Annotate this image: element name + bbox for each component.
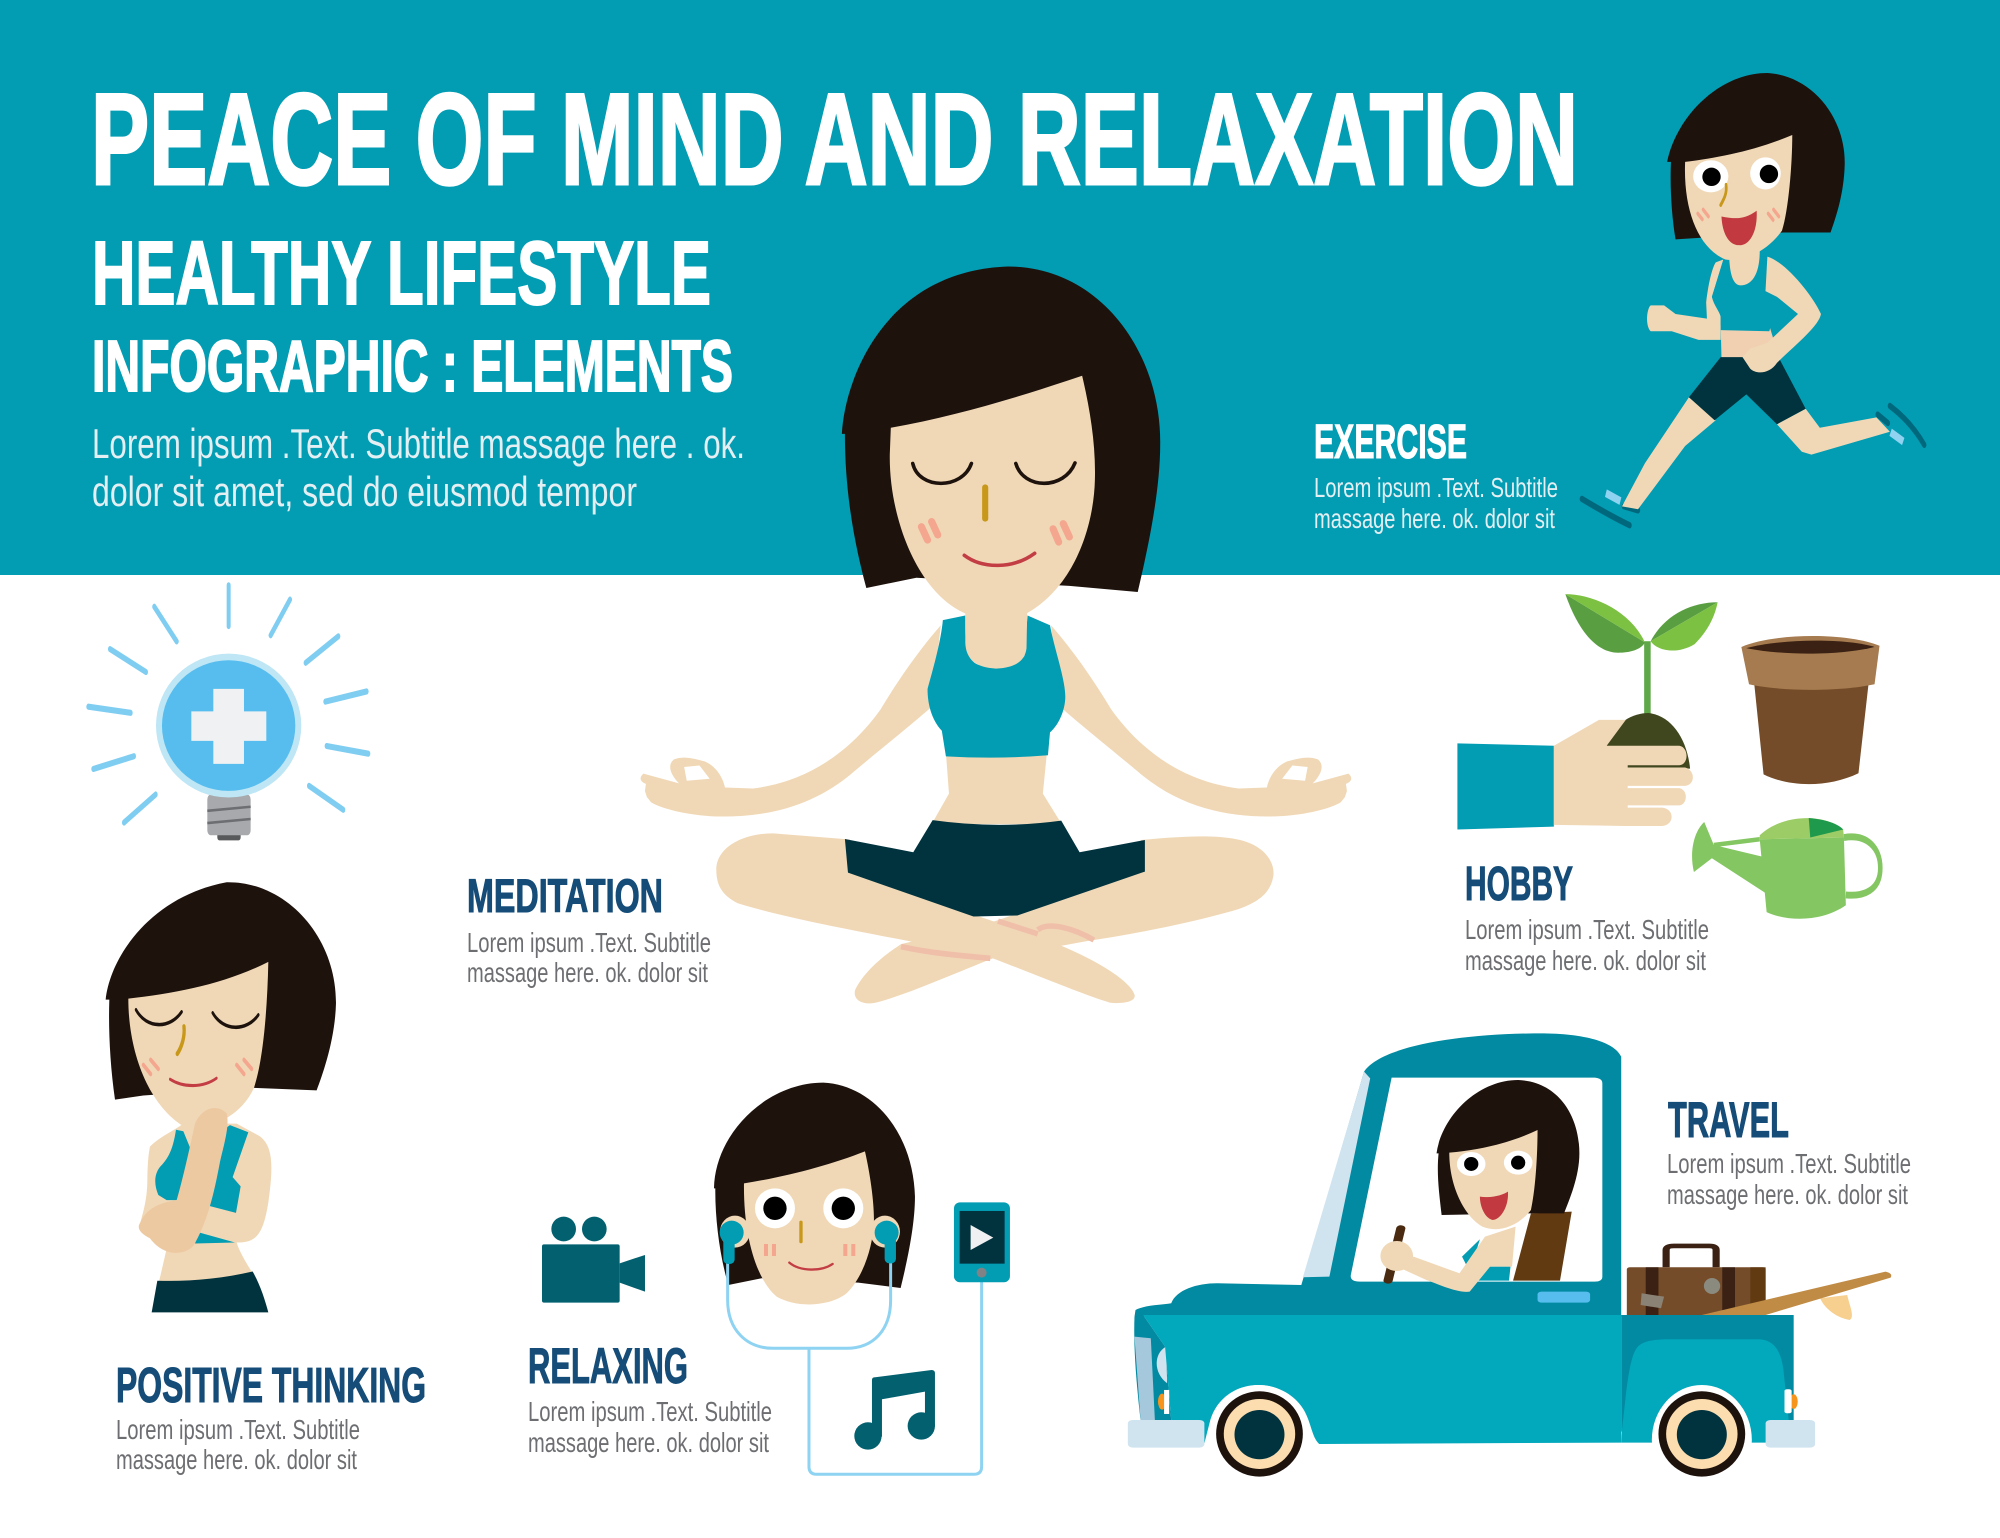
cross	[191, 689, 266, 764]
shorts	[1689, 354, 1806, 424]
cab body	[1143, 1315, 1621, 1444]
running woman	[1582, 73, 1924, 525]
heading: MEDITATION	[467, 869, 663, 922]
hair	[1667, 73, 1845, 239]
intro text	[92, 420, 745, 515]
mouth	[170, 1078, 217, 1086]
driver top	[1462, 1239, 1511, 1281]
description	[116, 1414, 360, 1475]
description	[528, 1396, 772, 1458]
icon: video camera	[542, 1217, 645, 1303]
right leg	[855, 836, 1274, 1003]
side window	[1351, 1078, 1602, 1282]
header banner	[0, 0, 2000, 575]
nose	[979, 487, 991, 519]
face	[1685, 135, 1792, 260]
description: Lorem ipsum .Text. Subtitle	[467, 927, 711, 958]
description	[1667, 1148, 1911, 1210]
steering wheel	[1388, 1228, 1401, 1281]
shorts	[152, 1272, 268, 1312]
label: relaxing	[528, 1338, 772, 1458]
hair	[106, 882, 336, 1100]
top	[1712, 257, 1777, 331]
label: hobby	[1465, 858, 1709, 976]
music player	[954, 1202, 1010, 1282]
right arm	[1051, 625, 1351, 817]
intro text: Lorem ipsum .Text. Subtitle massage here . ok.	[92, 420, 745, 467]
eyes	[755, 1188, 863, 1228]
raised arm	[139, 1108, 228, 1253]
left leg	[716, 833, 1135, 1003]
surfboard fin	[1820, 1295, 1852, 1320]
label: exercise	[1314, 416, 1558, 534]
eyes	[136, 1010, 258, 1027]
seat	[1513, 1212, 1572, 1281]
seedling	[1565, 594, 1718, 716]
watering can	[1692, 818, 1880, 919]
driver eyes	[1457, 1151, 1532, 1176]
blush	[1698, 210, 1779, 220]
foot lines	[901, 921, 1094, 958]
left arm	[641, 625, 941, 817]
rear wheel	[1652, 1385, 1752, 1495]
label: positive thinking	[116, 1359, 426, 1475]
truck front	[1134, 1315, 1171, 1421]
sports top	[928, 616, 1065, 758]
mouth	[789, 1263, 833, 1270]
description: Lorem ipsum .Text. Subtitle	[1314, 472, 1558, 503]
face	[744, 1151, 874, 1304]
truck cab	[1134, 1033, 1621, 1317]
shoe soles	[1582, 406, 1924, 525]
headlight	[1157, 1347, 1167, 1383]
pot	[1741, 636, 1880, 784]
surfboard	[1702, 1272, 1891, 1315]
title block	[91, 66, 1578, 515]
soil	[1607, 713, 1690, 769]
driver face	[1449, 1130, 1538, 1229]
heading: EXERCISE	[1314, 416, 1467, 469]
description: Lorem ipsum .Text. Subtitle	[1667, 1148, 1911, 1179]
driver hair	[1437, 1080, 1579, 1215]
description: massage here. ok. dolor sit	[528, 1427, 769, 1458]
description: Lorem ipsum .Text. Subtitle	[528, 1396, 772, 1427]
description: Lorem ipsum .Text. Subtitle	[116, 1414, 360, 1445]
top	[155, 1125, 248, 1213]
hobby illustrations	[1457, 594, 1880, 919]
mouth	[964, 553, 1035, 565]
bulb glass	[156, 654, 301, 798]
description: massage here. ok. dolor sit	[116, 1444, 357, 1475]
suitcase	[1627, 1246, 1766, 1317]
rays	[88, 585, 368, 823]
description: massage here. ok. dolor sit	[1667, 1179, 1908, 1210]
indicator lights	[1158, 1389, 1798, 1414]
intro text: dolor sit amet, sed do eiusmod tempor	[92, 468, 637, 515]
nose	[1721, 185, 1726, 205]
door handle	[1538, 1292, 1590, 1303]
icon: music note	[854, 1370, 935, 1450]
front grille	[1134, 1337, 1155, 1421]
heading: TRAVEL	[1668, 1092, 1789, 1148]
description	[1465, 914, 1709, 976]
thinking woman	[106, 882, 336, 1312]
front leg	[1622, 397, 1716, 509]
eyes	[913, 463, 1075, 483]
meditating woman	[641, 267, 1351, 1003]
description: massage here. ok. dolor sit	[1465, 945, 1706, 976]
description: Lorem ipsum .Text. Subtitle	[1465, 914, 1709, 945]
back leg	[1777, 409, 1890, 455]
hair	[842, 267, 1160, 592]
pickup truck with driver	[1128, 1033, 1891, 1495]
driver mouth	[1480, 1192, 1508, 1220]
hair	[714, 1083, 915, 1288]
front wheel	[1209, 1385, 1309, 1495]
blush	[921, 522, 1069, 542]
description: massage here. ok. dolor sit	[1314, 503, 1555, 534]
waist	[1721, 326, 1779, 357]
heading: HOBBY	[1465, 858, 1573, 911]
bumpers	[1128, 1420, 1815, 1448]
earphone cable	[728, 1260, 982, 1474]
description: massage here. ok. dolor sit	[467, 957, 708, 988]
blush	[766, 1244, 853, 1256]
ears	[720, 1216, 900, 1248]
left arm	[1647, 260, 1723, 340]
waist	[932, 753, 1062, 824]
sleeve	[1457, 743, 1554, 829]
earbuds	[720, 1221, 899, 1264]
subtitle: healthy lifestyle: HEALTHY LIFESTYLE	[92, 224, 711, 324]
description	[1314, 472, 1558, 534]
nose	[177, 1027, 184, 1054]
windshield	[1303, 1072, 1370, 1277]
neck	[1729, 251, 1760, 285]
heading: RELAXING	[528, 1338, 688, 1394]
truck bed	[1621, 1315, 1794, 1432]
mouth	[1721, 211, 1757, 245]
icon: light bulb with medical cross	[88, 585, 368, 840]
nose	[796, 1222, 806, 1242]
face	[128, 962, 268, 1127]
relaxing scene	[542, 1083, 1010, 1474]
face	[890, 376, 1095, 613]
shorts	[845, 820, 1145, 917]
description	[467, 927, 711, 988]
blush	[143, 1060, 252, 1074]
driver hand	[1380, 1241, 1413, 1271]
neck	[965, 592, 1028, 669]
subtitle: infographic elements: INFOGRAPHIC : ELEMENTS	[92, 327, 733, 407]
eyes	[1693, 157, 1781, 192]
hand	[1554, 720, 1693, 826]
finger gap	[684, 766, 710, 781]
shoe laces	[1606, 432, 1903, 501]
bed fender	[1621, 1339, 1791, 1443]
body	[140, 1124, 271, 1284]
bulb base	[207, 794, 251, 840]
label: travel	[1667, 1092, 1911, 1210]
label: meditation	[467, 869, 711, 988]
driver arm	[1401, 1227, 1516, 1292]
top lower edge	[195, 1232, 235, 1243]
right arm	[1743, 257, 1821, 372]
heading: POSITIVE THINKING	[116, 1359, 426, 1413]
